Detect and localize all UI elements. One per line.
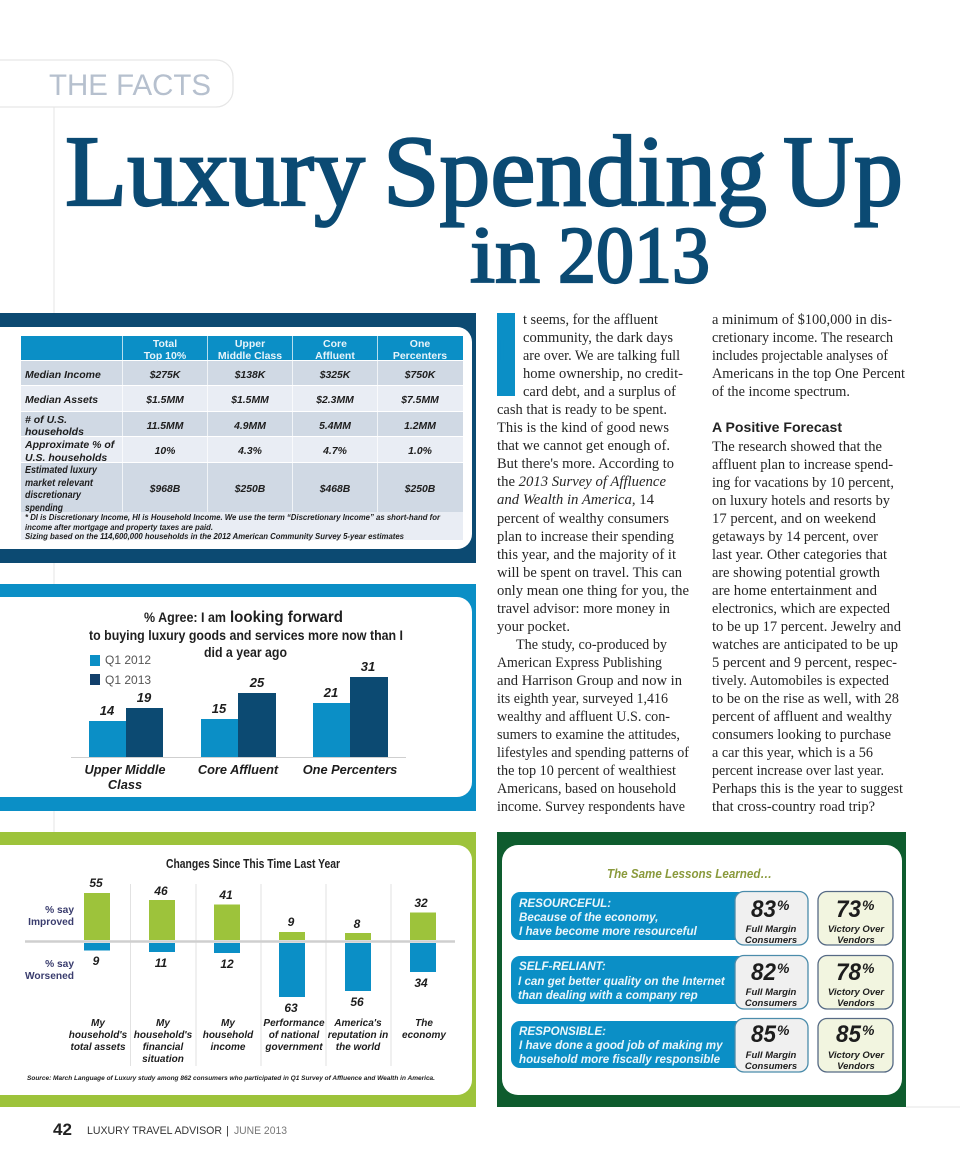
category labels: income [210, 1042, 246, 1053]
title: Luxury [65, 115, 365, 227]
row: responsible: Full Margin [746, 1050, 797, 1061]
article column one: sumers to examine the attitudes, [497, 727, 680, 743]
row: responsible: Vendors [837, 1061, 875, 1072]
row: self-reliant: SELF-RELIANT: [519, 960, 606, 973]
table header [144, 338, 447, 362]
chart values: 14 [100, 703, 115, 718]
bar values: 56 [350, 995, 364, 1009]
article column two forecast: consumers looking to purchase [712, 727, 891, 743]
article column one: cash that is ready to be spent. [497, 402, 667, 418]
row: responsible: Consumers [745, 1061, 797, 1072]
table values: 1.2MM [404, 421, 436, 432]
article column one: t seems, for the affluent [523, 312, 659, 328]
footer: JUNE 2013 [234, 1125, 287, 1137]
title: in [470, 210, 540, 300]
article column two forecast: last year. Other categories that [712, 547, 888, 563]
article column one: the 2013 Survey of Affluence [497, 474, 666, 490]
category labels: situation [142, 1054, 184, 1065]
row: responsible: 85 [751, 1021, 777, 1048]
category labels: My [91, 1018, 105, 1029]
chart legend [90, 653, 151, 687]
table values: $1.5MM [230, 395, 269, 406]
article column two forecast: watches are anticipated to be up [712, 637, 898, 653]
article column two forecast: are home entertainment and [712, 583, 877, 599]
table row labels: Median Income [25, 369, 101, 381]
article column two forecast: affluent plan to increase spend- [712, 457, 893, 473]
row: self-reliant: Vendors [837, 998, 875, 1009]
row: responsible [511, 1018, 893, 1072]
article column two intro: a minimum of $100,000 in dis- [712, 312, 892, 328]
drop cap: I [498, 334, 506, 367]
chart values: 31 [361, 659, 375, 674]
article column one: and Wealth in America, 14 [497, 492, 654, 508]
table values: 4.3% [237, 446, 262, 457]
row: responsible: I have done a good job of making my [519, 1039, 723, 1052]
chart values: 25 [249, 675, 265, 690]
table header: Affluent [315, 350, 355, 362]
table values: 10% [155, 446, 175, 457]
article column two forecast: to be up 17 percent. Jewelry and [712, 619, 901, 635]
table values: $750K [404, 370, 437, 381]
article column two forecast [712, 439, 904, 815]
article column two forecast: The research showed that the [712, 439, 882, 455]
source note: Source: March Language of Luxury study among 862 consumers who participated in Q1 Survey of Affluence and Wealth in America. [27, 1075, 435, 1082]
chart category labels: Core Affluent [198, 762, 279, 777]
panel: same lessons learned [497, 832, 906, 1107]
chart values: 19 [137, 690, 152, 705]
article column one: community, the dark days [523, 330, 673, 346]
article column two forecast: 5 percent and 9 percent, respec- [712, 655, 897, 671]
drop cap [497, 313, 515, 396]
chart title: did a year ago [204, 645, 287, 660]
row: resourceful: Victory Over [828, 924, 885, 935]
article column two forecast: electronics, which are expected [712, 601, 890, 617]
chart bars [71, 677, 406, 758]
row: resourceful: Consumers [745, 935, 797, 946]
table row labels: Estimated luxury [25, 464, 98, 476]
axis labels: Worsened [25, 971, 74, 982]
chart category labels: One Percenters [303, 762, 397, 777]
article column one: travel advisor: more money in [497, 601, 670, 617]
article column one: wealthy and affluent U.S. con- [497, 709, 670, 725]
bar values: 9 [288, 915, 295, 929]
chart heading: Changes Since This Time Last Year [166, 857, 340, 871]
title [65, 115, 903, 300]
table values: $138K [234, 370, 267, 381]
row: self-reliant [511, 956, 893, 1009]
chart title: looking forward [230, 609, 343, 626]
article column one: But there's more. According to [497, 456, 674, 472]
article column one: the top 10 percent of wealthiest [497, 763, 677, 779]
row: self-reliant: % [862, 960, 875, 976]
row: self-reliant: Full Margin [746, 987, 797, 998]
chart category labels [84, 762, 397, 792]
category labels: household's [69, 1030, 128, 1041]
row: responsible: % [862, 1022, 875, 1038]
table values: $1.5MM [145, 395, 184, 406]
category labels: America's [333, 1018, 382, 1029]
chart legend: Q1 2013 [105, 673, 151, 687]
panel: income table [0, 313, 476, 563]
article column two intro: Americans in the top One Percent [712, 366, 906, 382]
table footnote [25, 513, 441, 541]
article column one: percent of wealthy consumers [497, 511, 669, 527]
subheading: A Positive Forecast [712, 419, 842, 435]
row: resourceful: I have become more resourceful [519, 925, 698, 938]
category labels: household's [134, 1030, 193, 1041]
table row labels: market relevant [25, 477, 93, 489]
row: self-reliant: Consumers [745, 998, 797, 1009]
article column one: this year, and the majority of it [497, 547, 677, 563]
bar values: 8 [354, 917, 361, 931]
category labels: household [203, 1030, 254, 1041]
row: resourceful: % [862, 897, 875, 913]
article column two forecast: Perhaps this is the year to suggest [712, 781, 904, 797]
article column two forecast: a car this year, which is a 56 [712, 745, 873, 761]
panel: looking forward bar chart [0, 584, 476, 811]
article column one: Americans, based on household [497, 781, 676, 797]
table values: $468B [319, 484, 351, 495]
table values: 11.5MM [147, 421, 184, 432]
row: resourceful: 73 [836, 896, 862, 923]
row: resourceful: % [777, 897, 790, 913]
row: resourceful: RESOURCEFUL: [519, 897, 611, 910]
category labels: financial [143, 1042, 183, 1053]
row: self-reliant: Victory Over [828, 987, 885, 998]
table header: Upper [235, 338, 265, 350]
footer [53, 1120, 287, 1139]
article column one: home ownership, no credit- [523, 366, 683, 382]
table header: Core [323, 338, 347, 350]
chart legend: Q1 2012 [105, 653, 151, 667]
article column two forecast: percent of affluent and wealthy [712, 709, 892, 725]
row: resourceful [511, 892, 893, 946]
table footnote: Sizing based on the 114,600,000 households in the 2012 American Community Survey 5-year estimates [25, 532, 405, 541]
article column two forecast: that cross-country road trip? [712, 799, 875, 815]
article column one: your pocket. [497, 619, 570, 635]
chart title: % Agree: I am [144, 610, 226, 625]
bar values: 12 [220, 957, 234, 971]
row: responsible: RESPONSIBLE: [519, 1025, 606, 1038]
article column two intro [712, 312, 906, 400]
table values: $7.5MM [400, 395, 439, 406]
table row labels: # of U.S. [25, 414, 67, 426]
article column two forecast: getaways by 14 percent, over [712, 529, 878, 545]
table row labels: Approximate % of [24, 439, 116, 451]
article column one: American Express Publishing [497, 655, 662, 671]
article column one: will be spent on travel. This can [497, 565, 682, 581]
category labels: of national [269, 1030, 319, 1041]
axis labels: % say [45, 959, 74, 970]
article column one: plan to increase their spending [497, 529, 674, 545]
row: resourceful: Full Margin [746, 924, 797, 935]
axis labels [25, 905, 74, 982]
table values: $325K [319, 370, 352, 381]
category labels: My [221, 1018, 235, 1029]
article column one: This is the kind of good news [497, 420, 669, 436]
table header: Middle Class [218, 350, 282, 362]
bar values: 11 [155, 956, 168, 970]
article column one: card debt, and a surplus of [523, 384, 676, 400]
chart category labels: Upper Middle [84, 762, 166, 777]
table values: 1.0% [408, 446, 432, 457]
article column two intro: cretionary income. The research [712, 330, 893, 346]
article column two forecast: are showing potential growth [712, 565, 880, 581]
bar values: 34 [414, 976, 428, 990]
table footnote: * DI is Discretionary Income, HI is Household Income. We use the term “Discretionary Income” as short-hand for [25, 513, 441, 522]
bar values: 41 [218, 888, 233, 902]
footer: 42 [53, 1120, 72, 1139]
section tab: the facts: THE FACTS [49, 69, 211, 102]
article column two forecast: to be on the rise as well, with 28 [712, 691, 899, 707]
category labels: Performance [263, 1018, 325, 1029]
table values: $968B [149, 484, 181, 495]
table row labels: spending [25, 502, 63, 514]
table values: 4.9MM [233, 421, 266, 432]
row: resourceful: 83 [751, 896, 777, 923]
article column one: income. Survey respondents have [497, 799, 685, 815]
chart values: 15 [212, 701, 227, 716]
chart title: to buying luxury goods and services more now than I [89, 628, 403, 643]
article column one: and Harrison Group and now in [497, 673, 682, 689]
article column two forecast: tively. Automobiles is expected [712, 673, 889, 689]
chart category labels: Class [108, 777, 142, 792]
article column two forecast: ing for vacations by 10 percent, [712, 475, 894, 491]
title: Spending [383, 115, 767, 227]
category labels: government [264, 1042, 323, 1053]
table header: Top 10% [144, 350, 187, 362]
title: 2013 [558, 210, 710, 300]
bar values: 46 [153, 884, 168, 898]
bar values [89, 876, 428, 1015]
row: self-reliant: % [777, 960, 790, 976]
table values: $2.3MM [315, 395, 354, 406]
table values [145, 370, 439, 495]
table header: One [410, 338, 430, 350]
table values: 4.7% [322, 446, 347, 457]
table footnote: income after mortgage and property taxes are paid. [25, 523, 213, 532]
category labels: the world [336, 1042, 381, 1053]
article column one: are over. We are talking full [523, 348, 680, 364]
table row labels: Median Assets [25, 394, 98, 406]
chart title [89, 609, 403, 660]
improved and worsened bars [25, 893, 455, 997]
bar values: 32 [414, 896, 428, 910]
row: responsible: % [777, 1022, 790, 1038]
bar values: 63 [284, 1001, 298, 1015]
row: resourceful: Vendors [837, 935, 875, 946]
article column two forecast: 17 percent, and on weekend [712, 511, 876, 527]
article column one: its eighth year, surveyed 1,416 [497, 691, 668, 707]
article column two intro: includes projectable analyses of [712, 348, 888, 364]
row: responsible: household more fiscally responsible [519, 1053, 721, 1066]
article column one: only mean one thing for you, the [497, 583, 689, 599]
table values: $250B [234, 484, 266, 495]
row: self-reliant: 82 [751, 959, 777, 986]
row: self-reliant: 78 [836, 959, 862, 986]
article column two forecast: on luxury hotels and resorts by [712, 493, 890, 509]
category labels: total assets [70, 1042, 126, 1053]
category labels: The [415, 1018, 433, 1029]
table header: Percenters [393, 350, 447, 362]
category labels: reputation in [328, 1030, 388, 1041]
table values: $250B [404, 484, 436, 495]
row: self-reliant: I can get better quality on the Internet [518, 975, 726, 988]
row: self-reliant: than dealing with a company rep [518, 989, 698, 1002]
table values: $275K [149, 370, 182, 381]
table header: Total [153, 338, 177, 350]
footer: LUXURY TRAVEL ADVISOR [87, 1125, 222, 1137]
table row labels [24, 369, 116, 514]
axis labels: % say [45, 905, 74, 916]
panel: changes since last year chart [0, 832, 476, 1107]
table row labels: households [25, 426, 84, 438]
article column one: The study, co-produced by [516, 637, 667, 653]
article column two forecast: percent increase over last year. [712, 763, 884, 779]
chart values [100, 659, 375, 718]
axis labels: Improved [28, 917, 74, 928]
article column one: that we cannot get enough of. [497, 438, 670, 454]
title: Up [783, 115, 903, 227]
table row labels: U.S. households [25, 452, 107, 464]
article column two intro: of the income spectrum. [712, 384, 850, 400]
footer: | [226, 1125, 229, 1137]
row: responsible: Victory Over [828, 1050, 885, 1061]
category labels: economy [402, 1030, 446, 1041]
panel heading: The Same Lessons Learned… [607, 866, 772, 881]
category labels [69, 1018, 446, 1065]
bar values: 9 [93, 954, 100, 968]
article column one: lifestyles and spending patterns of [497, 745, 689, 761]
row: responsible: 85 [836, 1021, 862, 1048]
table row labels: discretionary [25, 489, 82, 501]
table values: 5.4MM [319, 421, 351, 432]
section tab: the facts [0, 60, 233, 107]
row: resourceful: Because of the economy, [519, 911, 658, 924]
article column one [497, 312, 689, 815]
bar values: 55 [89, 876, 103, 890]
chart values: 21 [323, 685, 338, 700]
category labels: My [156, 1018, 170, 1029]
